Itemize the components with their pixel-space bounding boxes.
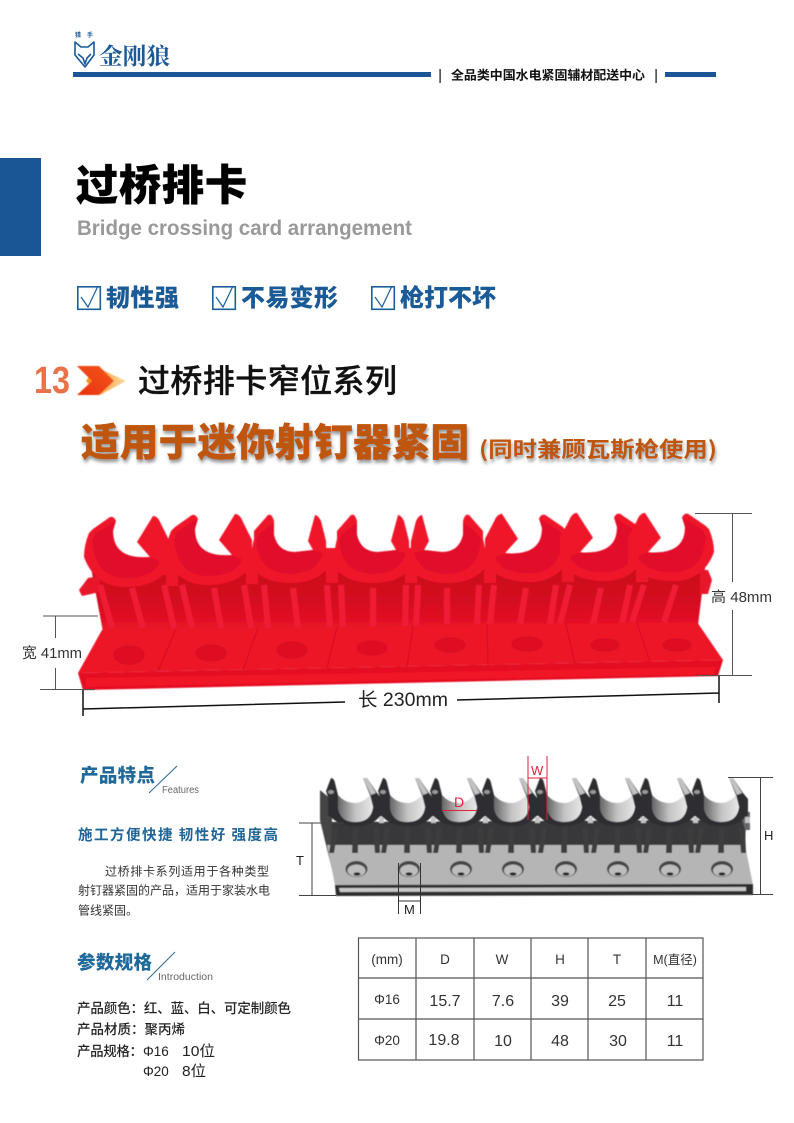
series number: 13 <box>34 360 70 402</box>
side accent block <box>0 158 41 256</box>
left and right side <box>320 790 336 885</box>
dimension D: D <box>454 794 464 810</box>
parameters list <box>77 997 292 1080</box>
icon: wolf head <box>75 42 94 67</box>
headline note: (同时兼顾瓦斯枪使用) <box>479 433 717 464</box>
application headline <box>81 412 717 468</box>
dimension M <box>398 863 420 917</box>
logo name: 金刚狼 <box>99 38 170 71</box>
english label: Features <box>162 785 199 796</box>
table row: Φ16 <box>374 992 683 1010</box>
parameters list: 8位 <box>182 1063 206 1080</box>
feature checks <box>78 278 496 313</box>
table header row: T <box>613 952 621 967</box>
clips <box>326 778 384 853</box>
english label: Introduction <box>158 972 213 983</box>
base plate <box>78 622 723 673</box>
table row: Φ20: 10 <box>494 1033 512 1050</box>
holes <box>346 861 733 877</box>
table row: Φ20 <box>374 1032 683 1050</box>
table row: Φ20: Φ20 <box>374 1033 400 1048</box>
parameters list: 10位 <box>182 1043 215 1060</box>
application headline: 适用于迷你射钉器紧固 <box>81 412 469 468</box>
dimension T <box>296 823 344 896</box>
slogan: 全品类中国水电紧固辅材配送中心 <box>451 64 646 84</box>
table header row: D <box>440 952 450 967</box>
height dimension: 高 48mm <box>711 589 772 606</box>
dimension W <box>528 756 547 820</box>
table row: Φ16: 25 <box>608 993 626 1010</box>
back wall <box>322 820 746 848</box>
table header row <box>371 952 697 967</box>
ribs <box>100 585 676 628</box>
table header row: W <box>496 952 509 967</box>
feature summary: 施工方便快捷 韧性好 强度高 <box>78 824 278 845</box>
table row: Φ20: 48 <box>551 1033 569 1050</box>
title: 过桥排卡 <box>76 152 247 213</box>
dimension H: H <box>764 828 773 843</box>
table header row: H <box>555 952 565 967</box>
table header row: (mm) <box>371 952 403 967</box>
series heading <box>34 356 397 402</box>
subtitle: Bridge crossing card arrangement <box>77 216 412 240</box>
parameters list: Φ20 <box>143 1064 169 1079</box>
left and right end lugs <box>79 570 712 596</box>
feature description: 射钉器紧固的产品，适用于家装水电 <box>78 882 270 898</box>
table header row: M(直径) <box>653 953 697 967</box>
parameters list: 产品材质：聚丙烯 <box>77 1018 185 1038</box>
features heading: 产品特点 <box>80 762 155 788</box>
width dimension <box>22 616 98 690</box>
table row: Φ20: 30 <box>609 1033 627 1050</box>
bridges between clips <box>166 548 648 586</box>
length dimension <box>83 676 719 716</box>
logo <box>75 30 170 71</box>
feature description: 过桥排卡系列适用于各种类型 <box>105 862 269 880</box>
parameters list: 产品规格： <box>77 1040 143 1060</box>
gray product diagram <box>320 778 753 896</box>
check: 韧性强: 韧性强 <box>106 278 179 313</box>
dimension W: W <box>531 763 544 778</box>
feature description <box>78 862 270 918</box>
feature description: 管线紧固。 <box>78 902 138 918</box>
parameters heading: 参数规格 <box>77 949 152 975</box>
parameters heading <box>77 949 213 983</box>
dimension D <box>442 794 477 810</box>
height dimension <box>695 514 772 676</box>
table row: Φ16: 15.7 <box>429 993 461 1010</box>
spec table <box>358 938 703 1060</box>
icon: chevron arrow <box>77 366 126 395</box>
dimension T: T <box>296 853 304 868</box>
table row: Φ16: 7.6 <box>492 993 514 1010</box>
parameters list: 产品颜色：红、蓝、白、可定制颜色 <box>77 997 292 1017</box>
front channel <box>78 660 723 690</box>
clips <box>84 516 170 587</box>
width dimension: 宽 41mm <box>22 645 82 662</box>
parameters list: Φ16 <box>143 1044 169 1059</box>
gray product dimensions <box>296 756 773 917</box>
features heading <box>80 762 199 796</box>
dimension H <box>728 778 773 894</box>
table row: Φ16: Φ16 <box>374 992 400 1007</box>
table row: Φ16: 39 <box>551 993 569 1010</box>
red product photo <box>78 513 723 690</box>
red product dimensions <box>22 514 772 716</box>
dimension M: M <box>404 902 415 917</box>
series name: 过桥排卡窄位系列 <box>138 356 397 402</box>
table row: Φ16: 11 <box>667 993 683 1010</box>
check: 不易变形: 不易变形 <box>241 278 338 313</box>
table row: Φ20: 11 <box>667 1033 683 1050</box>
plate <box>327 845 753 885</box>
back wall <box>90 560 706 632</box>
front channel <box>335 884 753 896</box>
length dimension: 长 230mm <box>358 689 448 711</box>
check: 枪打不坏: 枪打不坏 <box>400 278 496 313</box>
logo small text: 猎手 <box>75 30 93 39</box>
mounting holes <box>114 637 691 664</box>
header rule with slogan <box>73 64 716 84</box>
table row: Φ20: 19.8 <box>428 1032 460 1049</box>
